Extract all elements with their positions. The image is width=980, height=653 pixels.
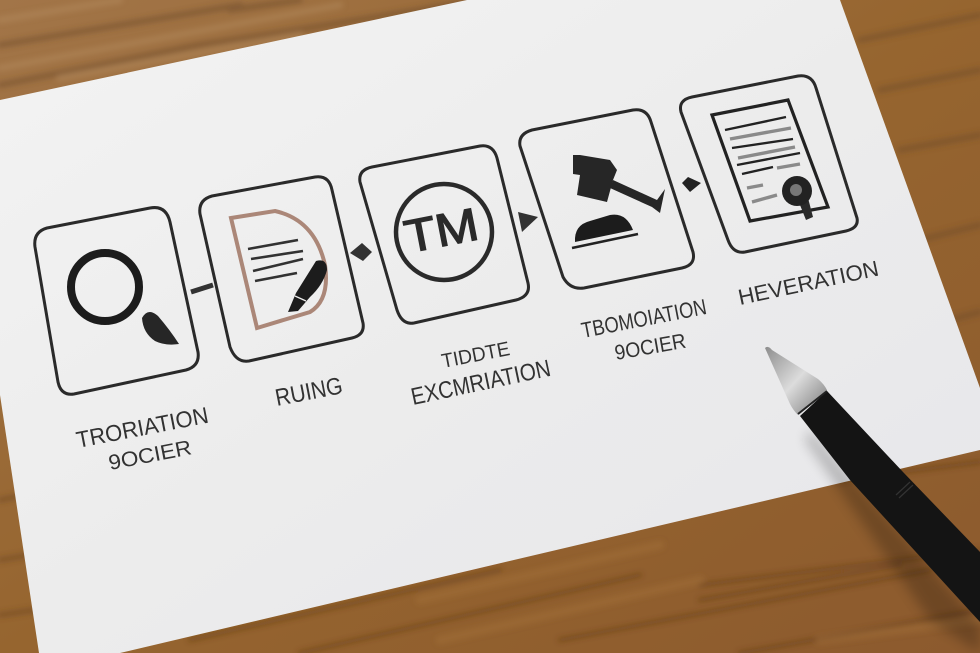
label 1 second line: 9OCIER: [107, 436, 193, 475]
icon: TM circle: TM: [400, 198, 483, 263]
pen: [765, 347, 980, 622]
frame 2: [200, 177, 363, 361]
icon: document outline: [231, 211, 326, 328]
icon: certificate text black: [725, 117, 800, 174]
pen tip: [765, 347, 827, 415]
icon: gavel handle: [610, 180, 665, 213]
frame 1: [35, 208, 198, 394]
label 5: HEVERATION: [736, 256, 881, 310]
pen band: [896, 482, 913, 498]
icon: gavel base: [572, 215, 638, 248]
pen shadow: [805, 430, 980, 653]
label 4: TBOMOIATION: [579, 294, 709, 343]
pen ring: [798, 391, 827, 414]
frame 5: [680, 76, 857, 252]
icon: pen nib: [288, 260, 327, 312]
connector 2: [350, 243, 372, 261]
step 4: gavel: [520, 110, 694, 288]
connector 1: [191, 285, 213, 292]
frame 4: [520, 110, 694, 288]
step 3: trademark: [360, 146, 528, 323]
icon: TM circle: [396, 184, 492, 280]
icon: gavel head: [573, 155, 617, 202]
label 1: TRORIATION: [74, 402, 210, 453]
pen body: [800, 391, 980, 622]
connector 4: [682, 177, 701, 192]
connector 3: [518, 212, 538, 232]
step 2: document: [200, 177, 363, 361]
icon: seal: [782, 176, 813, 220]
label 3 second line: EXCMRIATION: [409, 355, 553, 411]
icon: text lines: [248, 240, 303, 281]
frame 3: [360, 146, 528, 323]
icon: certificate text grey: [730, 128, 800, 202]
step 1: search: [35, 208, 198, 394]
label 4 second line: 9OCIER: [613, 330, 688, 365]
icon: certificate sheet: [712, 100, 828, 221]
step 5: certificate: [680, 76, 857, 252]
label 2: RUING: [273, 372, 345, 412]
icon: magnifying glass: [71, 253, 179, 345]
label 3: TIDDTE: [440, 338, 512, 373]
